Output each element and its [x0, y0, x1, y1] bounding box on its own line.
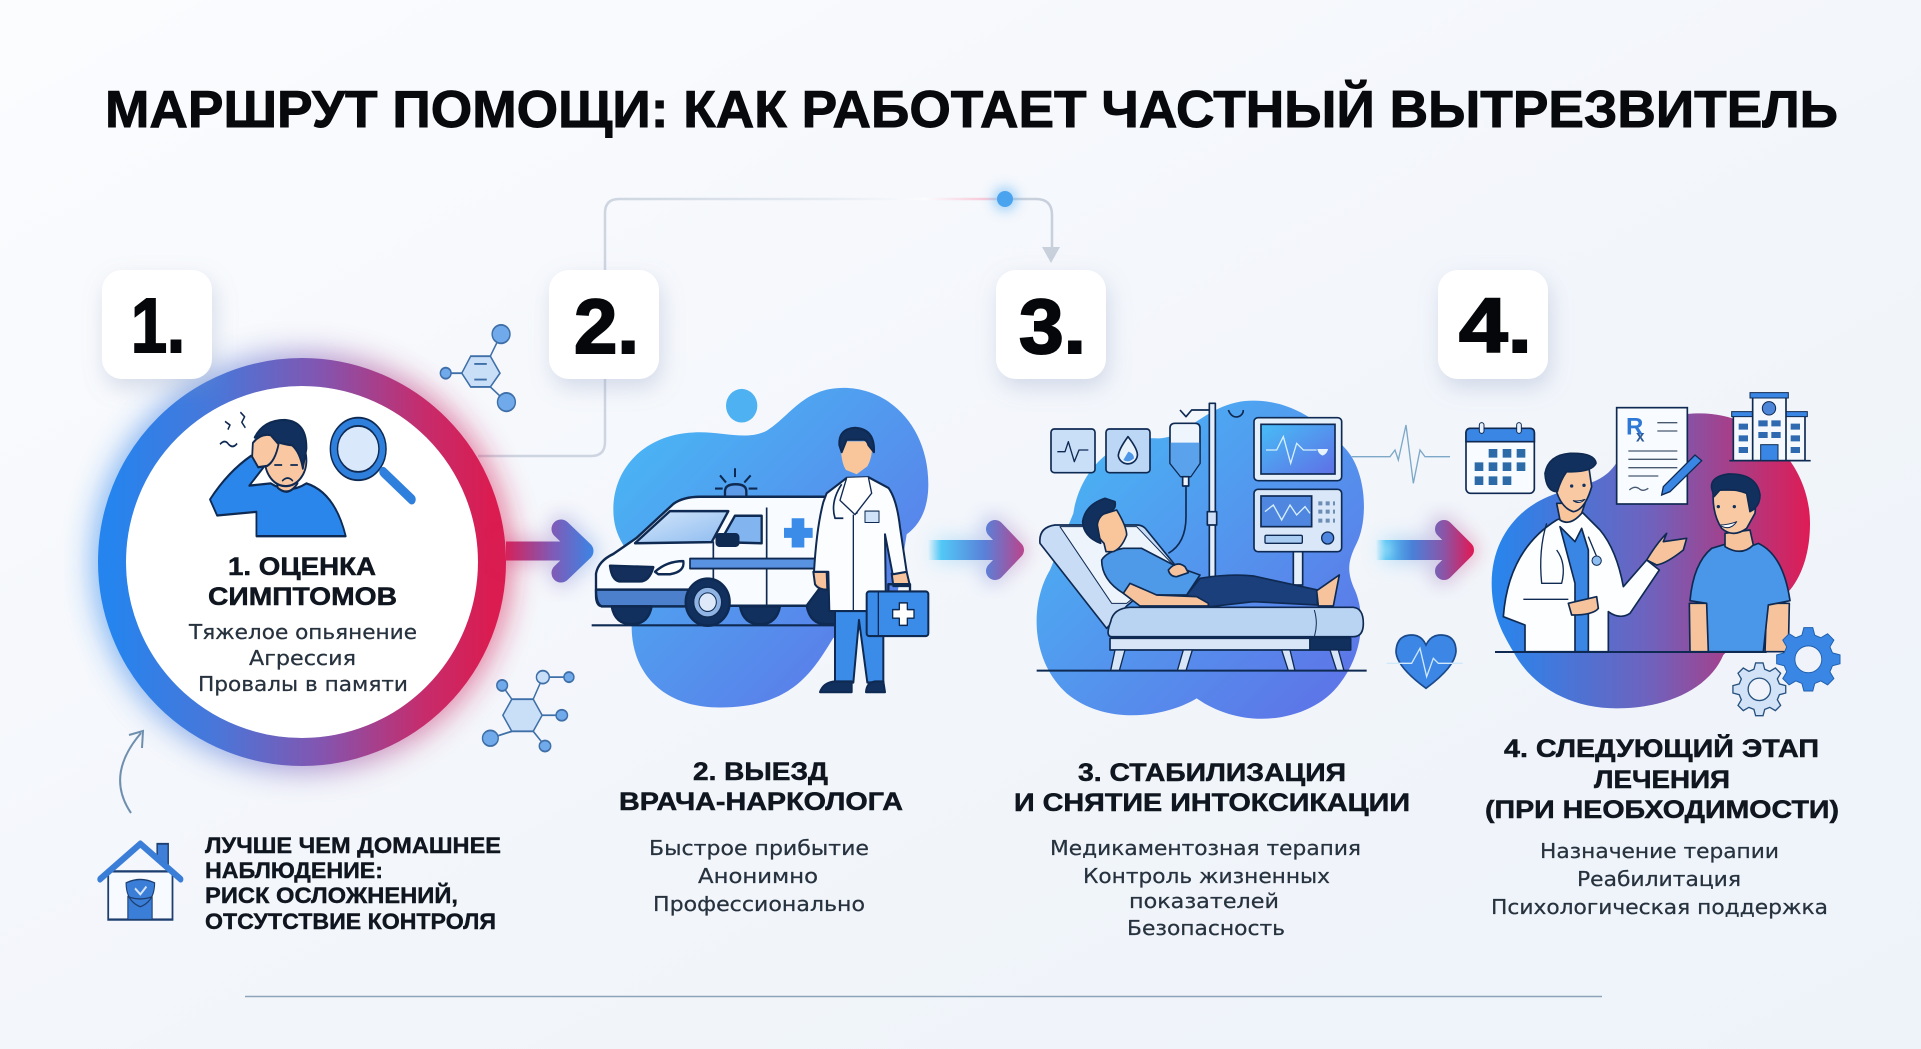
connector: from step 1 over to step 3	[478, 187, 1060, 456]
text: step 4 list: Назначение терапии	[1540, 839, 1779, 863]
blob background step 3	[1037, 401, 1364, 719]
icon: prescription: x	[1636, 429, 1645, 446]
icon: prescription: R	[1626, 413, 1643, 440]
text: step 1 symptoms: Тяжелое опьянение	[188, 620, 417, 644]
dot	[726, 389, 757, 422]
icon: small gear	[1733, 663, 1786, 716]
icon: IV drip and pole	[1168, 403, 1243, 577]
heading: step 2: 2. ВЫЕЗД	[693, 758, 828, 786]
icon: patient on bed	[1040, 498, 1363, 671]
blob background step 4	[1492, 413, 1810, 708]
badge 3: 3.	[1019, 284, 1086, 370]
heading: step 4: ЛЕЧЕНИЯ	[1594, 766, 1730, 794]
icon: doctor with case	[813, 428, 928, 692]
text: comparison with home observation: РИСК ОСЛОЖНЕНИЙ,	[205, 883, 458, 908]
panel: step 2 illustration	[592, 388, 928, 707]
text: step 3 list: Безопасность	[1127, 916, 1285, 940]
icon: molecule lower	[482, 671, 574, 752]
arrow 1 to 2	[506, 528, 585, 574]
text: comparison with home observation: ОТСУТСТВИЕ КОНТРОЛЯ	[205, 909, 496, 934]
floor line	[1495, 649, 1767, 655]
badge 3	[996, 270, 1106, 379]
badge 2	[549, 270, 659, 379]
icon: house with shield	[100, 844, 181, 920]
heading: step 1	[208, 553, 397, 611]
text: step 1 symptoms: Провалы в памяти	[198, 672, 408, 696]
badge 1	[102, 270, 212, 379]
text: comparison with home observation: НАБЛЮДЕНИЕ:	[205, 858, 383, 883]
heading: step 4: 4. СЛЕДУЮЩИЙ ЭТАП	[1504, 733, 1819, 763]
icon: person with headache and magnifier	[210, 412, 412, 536]
text: step 1 symptoms: Агрессия	[249, 646, 356, 670]
icon: ambulance	[596, 468, 837, 626]
icon: calendar	[1466, 423, 1534, 493]
badge 4	[1438, 270, 1548, 379]
badge 4: 4.	[1459, 283, 1532, 369]
text: step 3 list: Медикаментозная терапия	[1050, 836, 1361, 860]
text: comparison with home observation	[205, 833, 501, 934]
panel: step 4 illustration	[1466, 393, 1840, 716]
bottom rule	[245, 996, 1602, 998]
text: step 4 list	[1491, 839, 1828, 919]
floor line	[1037, 668, 1367, 674]
icon: doctor talking	[1503, 453, 1687, 652]
arrow 2 to 3	[928, 528, 1015, 572]
heading: step 2	[619, 758, 903, 816]
blob background step 2	[613, 388, 928, 707]
title: МАРШРУТ ПОМОЩИ: КАК РАБОТАЕТ ЧАСТНЫЙ ВЫТРЕЗВИТЕЛЬ	[105, 80, 1838, 139]
text: step 2 list: Быстрое прибытие	[649, 836, 869, 860]
panel: step 1 ring	[110, 370, 494, 754]
text: step 3 list: показателей	[1129, 889, 1279, 913]
text: step 3 list: Контроль жизненных	[1083, 864, 1330, 888]
ground line	[592, 622, 837, 628]
icon: ECG line	[1352, 425, 1450, 483]
arrow 3 to 4	[1376, 528, 1465, 572]
heading: step 3: 3. СТАБИЛИЗАЦИЯ	[1078, 759, 1346, 787]
text: step 4 list: Психологическая поддержка	[1491, 895, 1828, 919]
badge 2: 2.	[574, 284, 639, 370]
heading: step 1: 1. ОЦЕНКА	[228, 553, 376, 581]
text: comparison with home observation: ЛУЧШЕ ЧЕМ ДОМАШНЕЕ	[205, 833, 501, 858]
text: step 3 list	[1050, 836, 1361, 940]
icon: curved arrow to ring	[120, 731, 143, 813]
icon: prescription	[1617, 408, 1702, 504]
text: step 1 symptoms	[188, 620, 417, 696]
heading: step 1: СИМПТОМОВ	[208, 583, 397, 611]
icon: heart rate tile	[1051, 429, 1095, 473]
icon: molecule upper	[440, 325, 515, 411]
heading: step 3: И СНЯТИЕ ИНТОКСИКАЦИИ	[1014, 789, 1410, 817]
icon: drop tile	[1106, 429, 1150, 473]
heading: step 4	[1485, 733, 1839, 824]
badge 1: 1.	[131, 283, 185, 369]
text: step 4 list: Реабилитация	[1577, 867, 1741, 891]
heading: step 4: (ПРИ НЕОБХОДИМОСТИ)	[1485, 796, 1839, 824]
icon: lower monitor	[1254, 489, 1342, 585]
icon: big gear	[1777, 628, 1840, 691]
heading: step 2: ВРАЧА-НАРКОЛОГА	[619, 788, 903, 816]
panel: step 3 illustration	[1037, 401, 1463, 719]
text: step 2 list	[649, 836, 869, 916]
text: step 2 list: Профессионально	[653, 892, 865, 916]
icon: upper monitor	[1254, 418, 1342, 481]
text: step 2 list: Анонимно	[698, 864, 818, 888]
heading: step 3	[1014, 759, 1410, 817]
icon: heart	[1387, 635, 1463, 688]
icon: hospital	[1729, 393, 1811, 461]
icon: patient talking	[1689, 474, 1790, 652]
